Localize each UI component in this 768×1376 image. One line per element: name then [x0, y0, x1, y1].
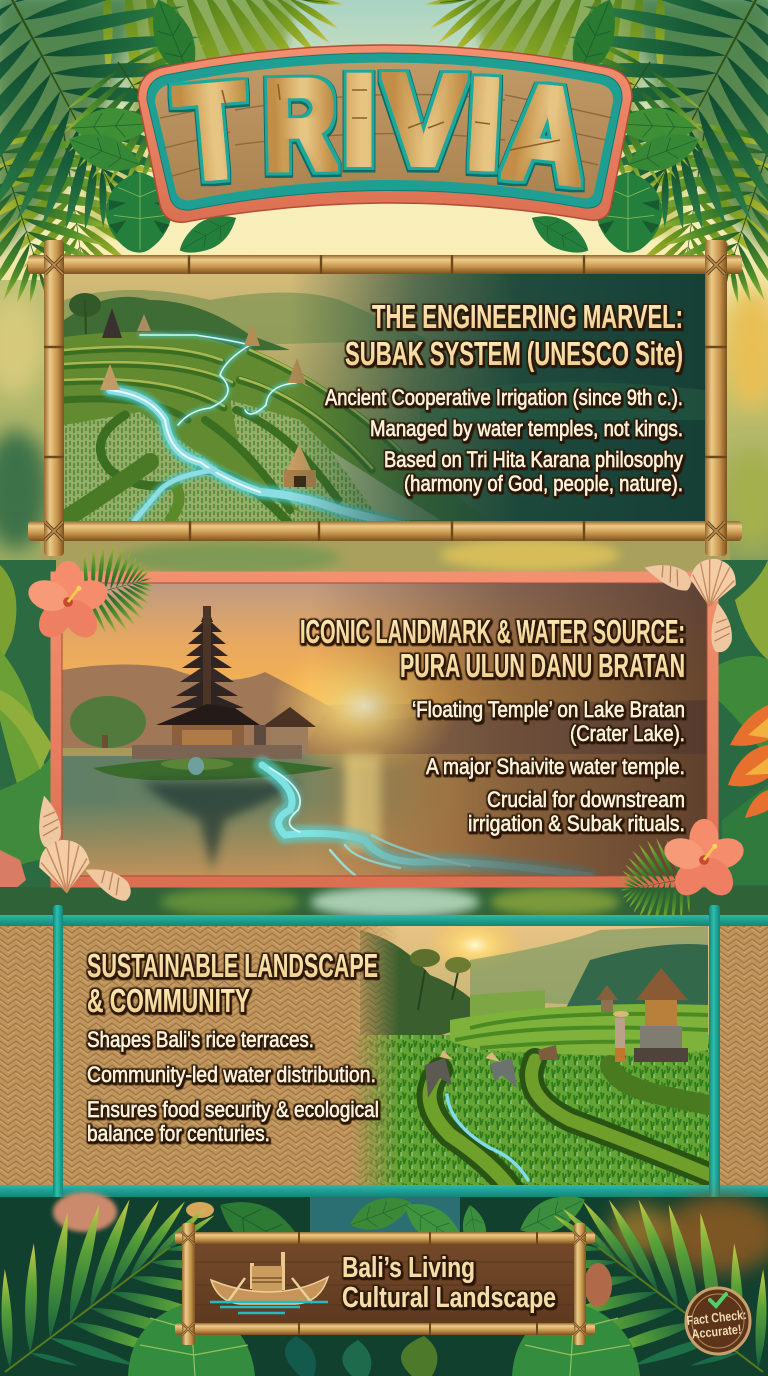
body: engineering marvel — [325, 385, 683, 496]
footer text — [342, 1252, 556, 1314]
body: engineering marvel: Managed by water temples, not kings. — [370, 416, 683, 441]
side haze: forest edges around upper panel — [0, 280, 768, 576]
body: sustainable landscape: Community-led water distribution. — [87, 1062, 376, 1087]
body: iconic landmark: (Crater Lake). — [570, 721, 685, 746]
water channel — [262, 765, 590, 876]
trees — [70, 696, 146, 748]
body: iconic landmark: ‘Floating Temple’ on Lake Bratan — [412, 697, 685, 722]
bamboo frame — [175, 1223, 595, 1345]
teal inner border — [147, 53, 622, 210]
body: iconic landmark: Crucial for downstream — [487, 787, 685, 812]
water temples — [100, 308, 316, 487]
body: sustainable landscape: Ensures food security & ecological — [87, 1097, 379, 1122]
coral frame — [56, 577, 713, 882]
text backdrop — [310, 582, 708, 878]
badge: fact check: Accurate! — [691, 1321, 742, 1342]
body: sustainable landscape: Shapes Bali's rice terraces. — [87, 1027, 314, 1052]
title text: TRIVIA: I — [341, 49, 377, 192]
title sign — [138, 45, 632, 222]
lake temple — [93, 606, 334, 780]
footer text: Bali’s Living — [342, 1252, 475, 1284]
body: engineering marvel: Based on Tri Hita Karana philosophy — [384, 447, 683, 472]
icon: boat — [210, 1252, 328, 1313]
bottom jungle foliage — [0, 1185, 768, 1376]
panel: Pura Ulun Danu Bratan — [0, 534, 768, 1376]
body: sustainable landscape — [87, 1027, 379, 1146]
panel: sustainable landscape — [0, 905, 768, 1207]
body: engineering marvel: Ancient Cooperative Irrigation (since 9th c.). — [325, 385, 683, 410]
title text: TRIVIA: T — [171, 56, 253, 209]
foliage: top right palm fronds — [410, 0, 768, 332]
title text: TRIVIA: V — [382, 47, 466, 192]
dark text backdrop — [290, 273, 706, 521]
panel: Subak system — [28, 240, 742, 556]
coral outer frame — [138, 45, 632, 222]
footer text: Cultural Landscape — [342, 1282, 556, 1314]
reflection — [140, 782, 300, 870]
teal frame bars — [0, 905, 768, 1207]
shells: bottom left — [34, 794, 136, 904]
flower: top left hibiscus — [24, 534, 164, 644]
title text: TRIVIA: I — [462, 52, 506, 197]
body: iconic landmark: A major Shaivite water temple. — [426, 754, 685, 779]
terraces and irrigation illustration — [64, 273, 706, 525]
heading: engineering marvel — [345, 298, 683, 372]
side foliage around temple panel — [0, 560, 768, 918]
body: iconic landmark: irrigation & Subak rituals. — [468, 811, 685, 836]
woven fade over illustration — [350, 926, 397, 1185]
heading: sustainable landscape: & COMMUNITY — [87, 982, 250, 1019]
title text: TRIVIA: A — [498, 55, 593, 212]
badge: fact check — [686, 1288, 750, 1354]
rice terrace illustration — [350, 915, 710, 1195]
heliconia — [728, 705, 768, 818]
title text: TRIVIA — [171, 47, 593, 212]
wood board — [190, 1240, 578, 1328]
irrigation channels — [110, 335, 400, 525]
heading: sustainable landscape — [87, 947, 378, 1019]
heading: sustainable landscape: SUSTAINABLE LANDSCAPE — [87, 947, 378, 984]
shrine — [596, 968, 688, 1062]
woven side mats — [0, 926, 768, 1185]
badge: fact check: Fact Check: — [686, 1307, 747, 1328]
sunset lake illustration — [62, 582, 708, 878]
heading: iconic landmark — [300, 613, 685, 684]
wooden board — [155, 62, 613, 200]
body: sustainable landscape: balance for centuries. — [87, 1121, 270, 1146]
title text: TRIVIA: R — [263, 53, 337, 198]
bamboo frame: panel 1 — [28, 240, 742, 556]
icon: check mark — [710, 1294, 726, 1306]
shells: top right — [641, 556, 739, 653]
body: engineering marvel: (harmony of God, people, nature). — [404, 471, 683, 496]
body: iconic landmark — [412, 697, 685, 836]
flower: bottom right hibiscus — [613, 819, 748, 935]
rice farmers — [425, 1011, 629, 1098]
footer sign — [175, 1223, 595, 1345]
foliage: top left palm fronds — [0, 0, 358, 332]
